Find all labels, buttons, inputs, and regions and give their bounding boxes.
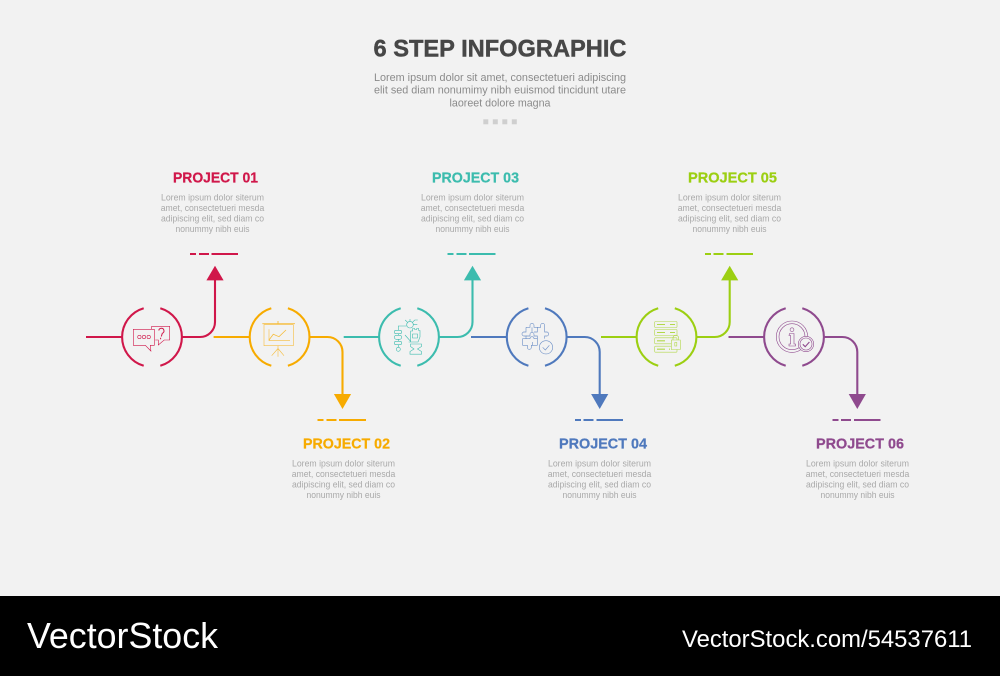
circle ring (764, 308, 824, 366)
text block: project 01 (161, 193, 265, 234)
panel: project 02 (214, 308, 396, 500)
arrow: connector down (728, 337, 866, 409)
icon: speech bubbles (133, 326, 170, 351)
title: 6 STEP INFOGRAPHIC (374, 36, 626, 63)
text block: project 01: Lorem ipsum dolor siterum (161, 193, 264, 203)
text block: project 02 (292, 459, 396, 500)
circle ring (379, 308, 439, 366)
icon: info with check (776, 321, 814, 352)
footer logo: VectorStock (27, 615, 219, 656)
panel: project 06 (728, 308, 910, 500)
text block: project 06 (806, 459, 910, 500)
heading: project 03: PROJECT 03 (432, 170, 519, 187)
dashes (318, 419, 366, 421)
heading: project 01: PROJECT 01 (173, 170, 258, 187)
icon: server with lock (655, 322, 680, 352)
circle ring (250, 308, 309, 366)
circle ring (637, 308, 696, 366)
text block: project 01: nonummy nibh euis (176, 224, 250, 234)
text block: project 04: amet, consectetueri mesda (548, 469, 652, 479)
text block: project 03: adipiscing elit, sed diam co (421, 214, 524, 224)
heading: project 02: PROJECT 02 (303, 436, 390, 453)
text block: project 05: adipiscing elit, sed diam co (678, 214, 781, 224)
arrow: connector down (471, 337, 608, 409)
subtitle text block (374, 72, 626, 109)
title dots (483, 119, 517, 124)
dashes (705, 253, 753, 255)
arrow: connector up (344, 266, 481, 337)
text block: project 01: adipiscing elit, sed diam co (161, 214, 264, 224)
text block: project 06: Lorem ipsum dolor siterum (806, 459, 909, 469)
icon: puzzle with check (522, 323, 553, 354)
subtitle text block: laoreet dolore magna (450, 97, 551, 109)
heading: project 05: PROJECT 05 (688, 170, 777, 187)
panel: project 05 (601, 170, 782, 366)
text block: project 06: nonummy nibh euis (820, 490, 895, 500)
text block: project 05 (678, 193, 782, 234)
icon: flowchart and robot hand (394, 319, 422, 354)
heading: project 04: PROJECT 04 (559, 436, 648, 453)
panel: project 01 (86, 170, 265, 366)
text block: project 02: nonummy nibh euis (306, 490, 381, 500)
dashes (575, 419, 623, 421)
icon: presentation board (262, 321, 295, 357)
text block: project 02: adipiscing elit, sed diam co (292, 480, 395, 490)
text block: project 03: amet, consectetueri mesda (421, 203, 525, 213)
text block: project 06: amet, consectetueri mesda (806, 469, 910, 479)
footer url: VectorStock.com/54537611 (682, 626, 972, 653)
circle ring (507, 308, 567, 366)
text block: project 04: nonummy nibh euis (562, 490, 637, 500)
text block: project 04 (548, 459, 652, 500)
circle ring (122, 308, 182, 366)
arrow: connector up (601, 266, 738, 337)
footer band (0, 596, 1000, 676)
dashes (190, 253, 238, 255)
text block: project 05: nonummy nibh euis (692, 224, 767, 234)
text block: project 03: Lorem ipsum dolor siterum (421, 193, 524, 203)
subtitle text block: Lorem ipsum dolor sit amet, consectetueri adipiscing (374, 72, 626, 84)
arrow: connector up (86, 266, 224, 337)
panel: project 04 (471, 308, 652, 500)
text block: project 04: Lorem ipsum dolor siterum (548, 459, 651, 469)
dashes (832, 419, 880, 421)
text block: project 03: nonummy nibh euis (436, 224, 510, 234)
text block: project 05: amet, consectetueri mesda (678, 203, 782, 213)
heading: project 06: PROJECT 06 (816, 436, 904, 453)
text block: project 01: amet, consectetueri mesda (161, 203, 265, 213)
text block: project 05: Lorem ipsum dolor siterum (678, 193, 781, 203)
text block: project 02: amet, consectetueri mesda (292, 469, 396, 479)
text block: project 04: adipiscing elit, sed diam co (548, 480, 651, 490)
dashes (448, 253, 496, 255)
arrow: connector down (214, 337, 351, 409)
text block: project 06: adipiscing elit, sed diam co (806, 480, 909, 490)
panel: project 03 (344, 170, 525, 366)
text block: project 03 (421, 193, 525, 234)
text block: project 02: Lorem ipsum dolor siterum (292, 459, 395, 469)
subtitle text block: elit sed diam nonumimy nibh euismod tincidunt utare (374, 85, 626, 97)
